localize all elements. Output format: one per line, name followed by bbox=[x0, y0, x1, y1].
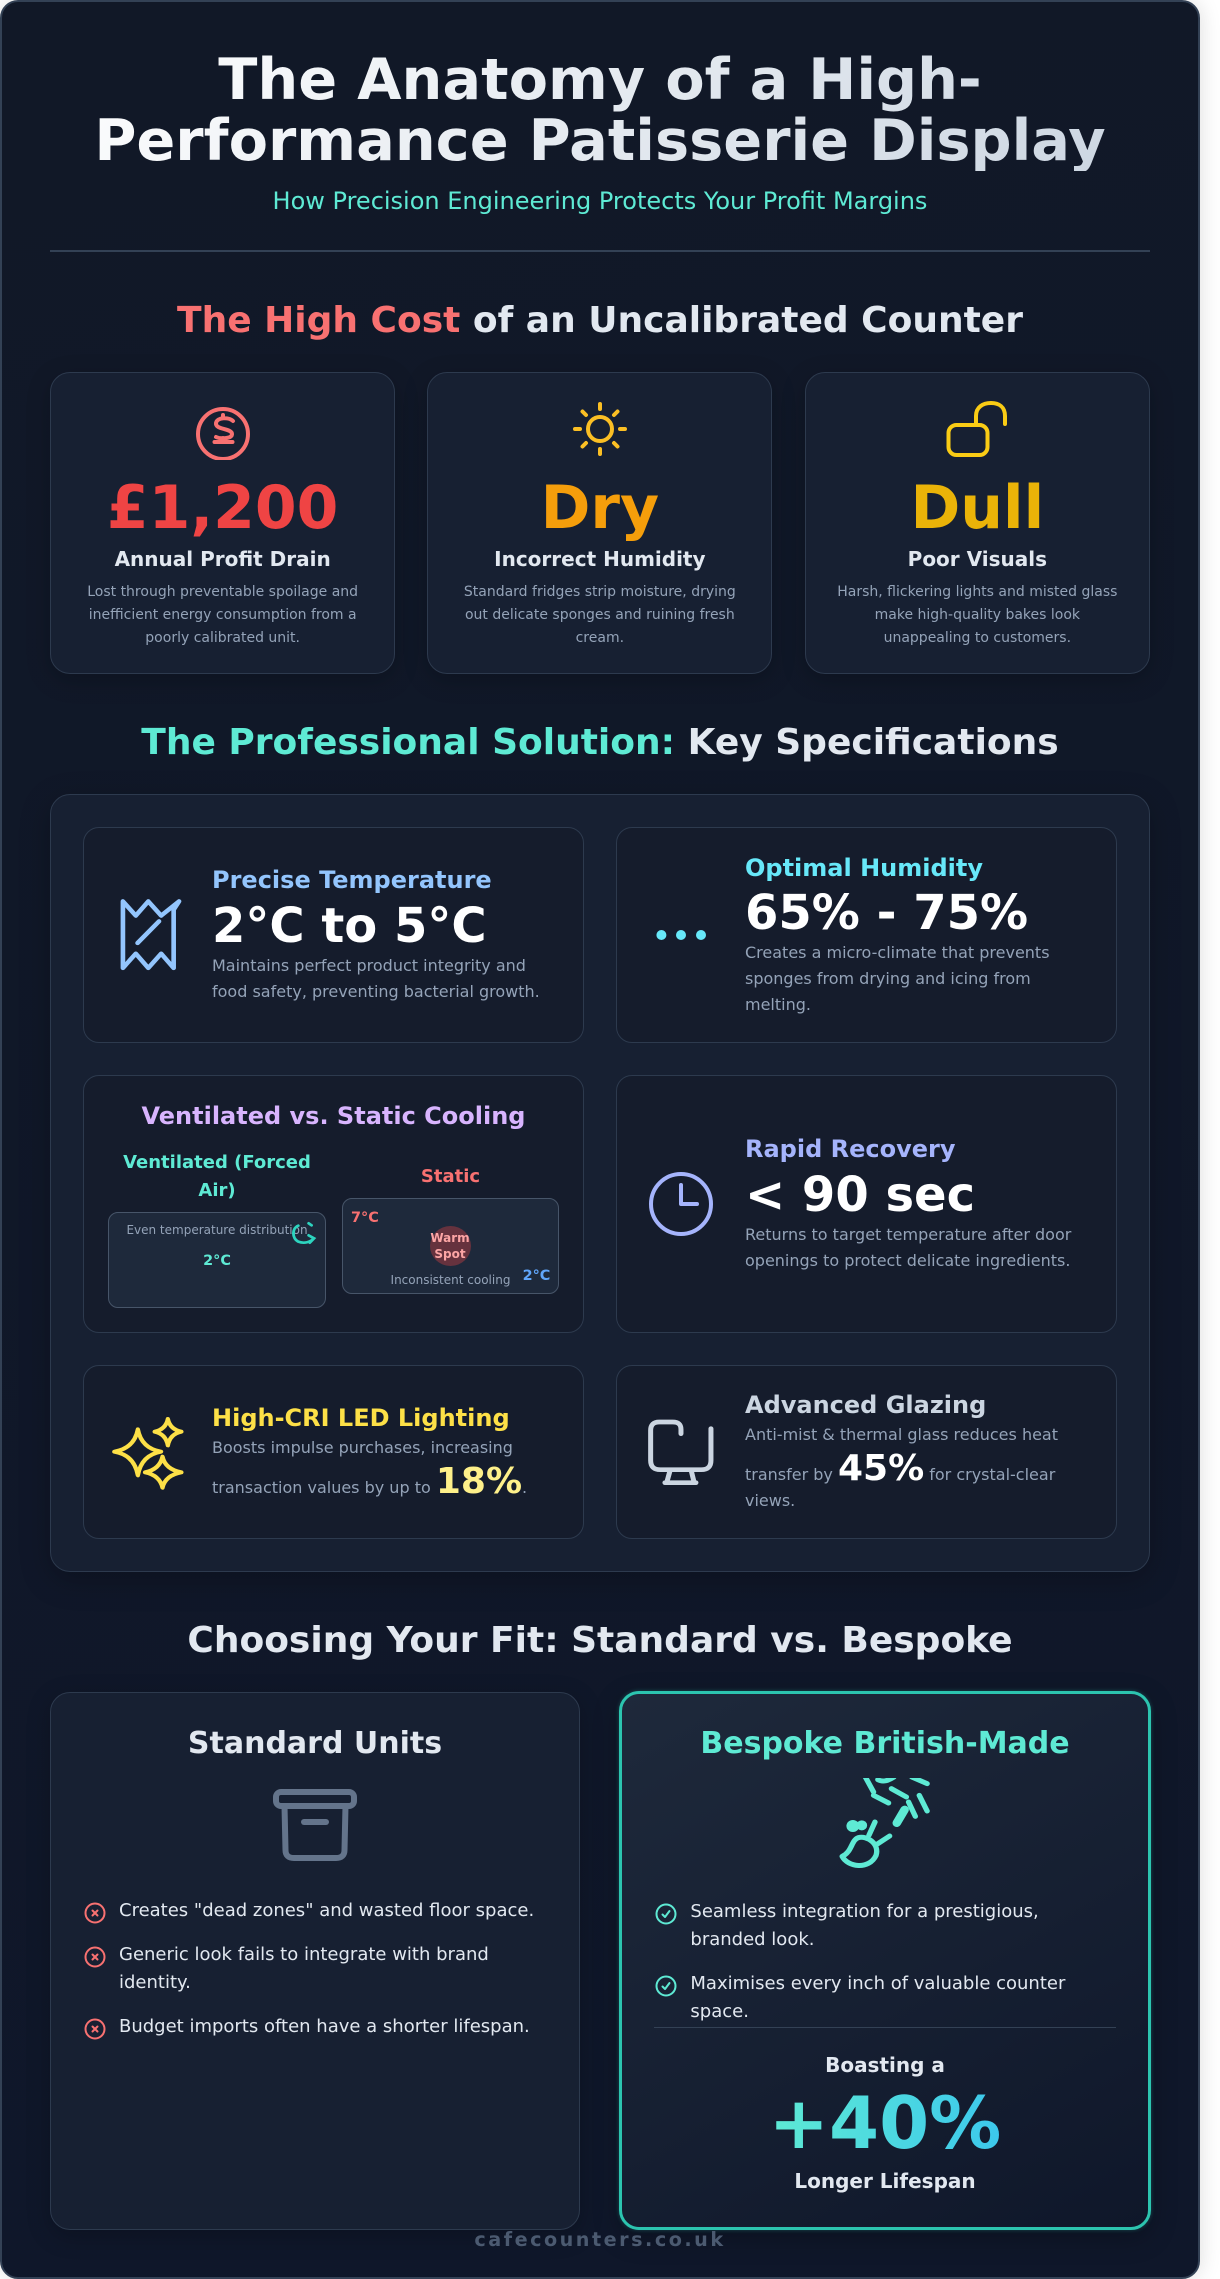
item text: Maximises every inch of valuable counter bbox=[690, 1973, 1065, 1994]
panel: humidity card bbox=[427, 372, 772, 674]
static column bbox=[342, 1166, 559, 1294]
item text: Creates "dead zones" and wasted floor space. bbox=[119, 1900, 534, 1921]
icon: airflow bbox=[292, 1222, 316, 1244]
diagram caption: Even temperature distribution bbox=[126, 1223, 308, 1237]
title bbox=[50, 50, 1150, 171]
panel title: Bespoke British-Made bbox=[700, 1726, 1070, 1761]
item text: branded look. bbox=[690, 1929, 814, 1950]
spec description bbox=[745, 942, 1050, 1014]
warm spot bbox=[430, 1226, 470, 1266]
panel title: Standard Units bbox=[188, 1726, 442, 1760]
header bbox=[50, 46, 1150, 252]
card description: Standard fridges strip moisture, drying bbox=[464, 584, 736, 600]
item text bbox=[690, 1973, 1066, 2022]
footer: cafecounters.co.uk bbox=[474, 2228, 726, 2251]
list item bbox=[84, 2016, 530, 2040]
column heading: Air) bbox=[198, 1180, 236, 1200]
panel: profit drain card bbox=[50, 372, 395, 674]
spec title: Rapid Recovery bbox=[745, 1135, 956, 1163]
panel: bespoke british-made bbox=[619, 1691, 1151, 2230]
card description: cream. bbox=[576, 630, 624, 646]
ventilated diagram bbox=[108, 1212, 326, 1308]
icon: dots bbox=[656, 930, 706, 940]
icon: check bbox=[656, 1904, 676, 1924]
icon: cross bbox=[84, 1902, 106, 1924]
spec description: Returns to target temperature after door bbox=[745, 1224, 1071, 1244]
card description: Lost through preventable spoilage and bbox=[87, 584, 358, 600]
warm spot label: Spot bbox=[434, 1246, 466, 1260]
temperature label: 2°C bbox=[203, 1253, 231, 1269]
icon: monitor bbox=[648, 1420, 714, 1485]
icon: sun bbox=[573, 402, 627, 456]
spec description with stat: transfer by 45% for crystal-clear bbox=[745, 1448, 1055, 1488]
item text: Seamless integration for a prestigious, bbox=[690, 1901, 1039, 1922]
warm spot label bbox=[430, 1230, 470, 1260]
panel: visuals card bbox=[805, 372, 1150, 674]
ventilated column bbox=[108, 1152, 326, 1308]
card description: out delicate sponges and ruining fresh bbox=[465, 607, 735, 623]
card description bbox=[837, 584, 1117, 646]
panel: key specifications bbox=[50, 794, 1150, 1572]
spec description with stat: transaction values by up to 18%. bbox=[212, 1460, 527, 1502]
lifespan stat bbox=[769, 2052, 1001, 2192]
item text: identity. bbox=[119, 1972, 191, 1993]
cool temperature label: 2°C bbox=[523, 1268, 550, 1284]
card title: Poor Visuals bbox=[908, 547, 1047, 571]
spec description with stat bbox=[745, 1448, 1056, 1510]
spec title: Optimal Humidity bbox=[745, 854, 983, 882]
spec description bbox=[745, 1224, 1072, 1270]
icon: clock bbox=[649, 1172, 713, 1236]
item text bbox=[690, 1901, 1039, 1950]
heading: choosing your fit: Choosing Your Fit: Standard vs. Bespoke bbox=[187, 1620, 1013, 1661]
spec title: Advanced Glazing bbox=[745, 1391, 986, 1419]
spec description: Anti-mist & thermal glass reduces heat bbox=[745, 1424, 1058, 1444]
card description: inefficient energy consumption from a bbox=[89, 607, 357, 623]
warm spot label: Warm bbox=[430, 1230, 470, 1244]
item text: Generic look fails to integrate with brand bbox=[119, 1944, 489, 1965]
warm temperature label: 7°C bbox=[351, 1210, 379, 1226]
spec value: 2°C to 5°C bbox=[212, 898, 487, 954]
card description: poorly calibrated unit. bbox=[145, 630, 300, 646]
card description: Harsh, flickering lights and misted glass bbox=[837, 584, 1117, 600]
column heading: Static bbox=[421, 1166, 480, 1186]
heading: high cost: The High Cost of an Uncalibrated Counter bbox=[177, 300, 1023, 340]
icon: check bbox=[656, 1976, 676, 1996]
panel: standard units bbox=[50, 1692, 580, 2230]
icon: cross bbox=[84, 1946, 106, 1968]
title: The Anatomy of a High- bbox=[218, 46, 982, 113]
card title: Annual Profit Drain bbox=[115, 547, 331, 571]
card description: make high-quality bakes look bbox=[875, 607, 1080, 623]
spec: ventilated vs static bbox=[83, 1075, 584, 1333]
item text: Budget imports often have a shorter lifespan. bbox=[119, 2016, 530, 2037]
icon: coin bbox=[196, 407, 250, 460]
column heading: Ventilated (Forced bbox=[123, 1152, 311, 1172]
stat value: +40% bbox=[769, 2081, 1001, 2165]
spec title: Precise Temperature bbox=[212, 866, 492, 894]
stat lead-in: Boasting a bbox=[825, 2052, 945, 2076]
card description bbox=[464, 584, 736, 646]
spec value: 65% - 75% bbox=[745, 885, 1028, 941]
icon: cross bbox=[84, 2018, 106, 2040]
icon: sparkles bbox=[112, 1417, 184, 1490]
static diagram bbox=[342, 1198, 559, 1294]
spec description: food safety, preventing bacterial growth. bbox=[212, 982, 540, 1001]
stat: dry: Dry bbox=[541, 473, 659, 543]
spec: humidity bbox=[616, 827, 1117, 1043]
spec value: < 90 sec bbox=[745, 1167, 975, 1223]
stat label: Longer Lifespan bbox=[794, 2168, 976, 2192]
spec: rapid recovery bbox=[616, 1075, 1117, 1333]
stat: dull: Dull bbox=[910, 473, 1044, 543]
item text bbox=[119, 1944, 489, 1993]
spec description: openings to protect delicate ingredients. bbox=[745, 1250, 1070, 1270]
stat: profit drain: £1,200 bbox=[107, 473, 338, 543]
card description: unappealing to customers. bbox=[884, 630, 1071, 646]
icon: temperature ticket bbox=[120, 899, 182, 970]
card title: Incorrect Humidity bbox=[494, 547, 706, 571]
spec title: Ventilated vs. Static Cooling bbox=[142, 1102, 525, 1130]
spec description with stat: views. bbox=[745, 1490, 795, 1510]
spec: glazing bbox=[616, 1365, 1117, 1539]
card description bbox=[87, 584, 358, 646]
icon: archive box bbox=[273, 1789, 357, 1861]
header divider bbox=[50, 250, 1150, 252]
panel divider bbox=[654, 2027, 1116, 2028]
spec description bbox=[212, 956, 540, 1001]
spec description: Maintains perfect product integrity and bbox=[212, 956, 526, 975]
diagram caption: Inconsistent cooling bbox=[391, 1273, 510, 1287]
icon: pastry tool bbox=[840, 1778, 930, 1868]
spec description: sponges from drying and icing from bbox=[745, 968, 1031, 988]
list item bbox=[656, 1901, 1039, 1950]
spec description: melting. bbox=[745, 994, 811, 1014]
spec description: Creates a micro-climate that prevents bbox=[745, 942, 1050, 962]
title: Performance Patisserie Display bbox=[94, 106, 1106, 174]
column heading bbox=[123, 1152, 311, 1200]
item text: space. bbox=[690, 2001, 749, 2022]
list item bbox=[84, 1944, 489, 1993]
spec description: Boosts impulse purchases, increasing bbox=[212, 1438, 513, 1456]
subtitle: How Precision Engineering Protects Your Profit Margins bbox=[273, 187, 927, 215]
list item bbox=[84, 1900, 534, 1924]
heading: solution: The Professional Solution: Key Specifications bbox=[141, 722, 1059, 762]
spec: temperature bbox=[83, 827, 584, 1043]
spec: LED lighting bbox=[83, 1365, 584, 1539]
spec title: High-CRI LED Lighting bbox=[212, 1404, 510, 1432]
icon: open lock bbox=[946, 401, 1007, 457]
list item bbox=[656, 1973, 1066, 2022]
